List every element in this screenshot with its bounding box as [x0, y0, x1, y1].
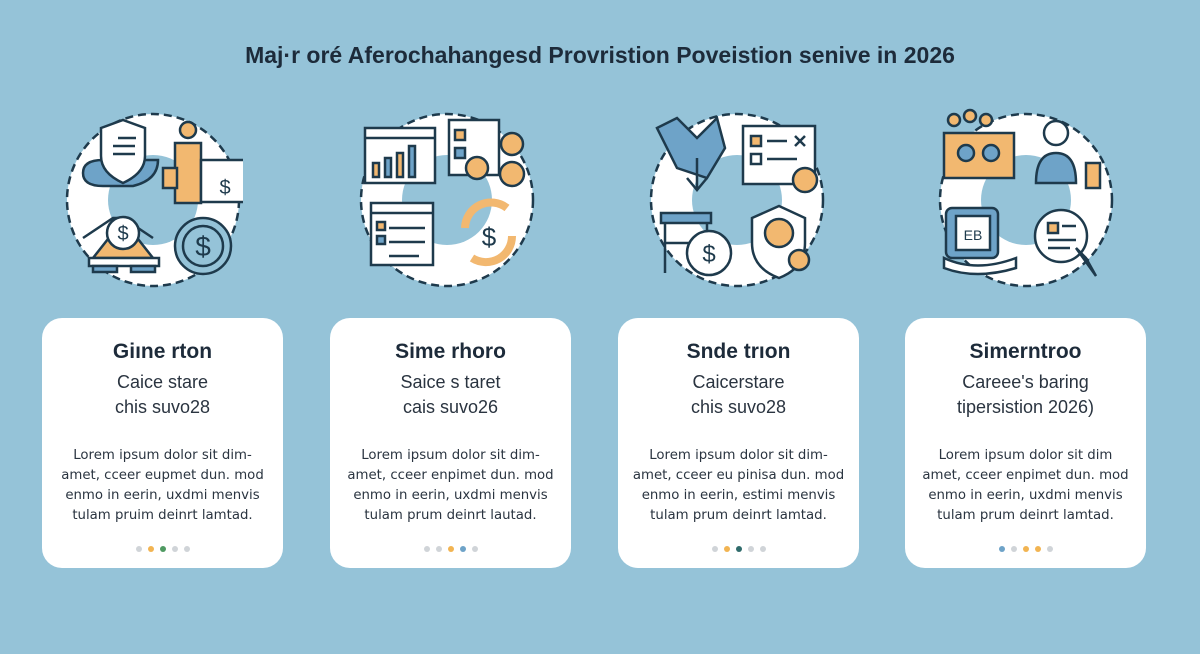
card 4: Careee's baring: [962, 372, 1089, 392]
card 4: tipersistion 2026): [957, 397, 1094, 417]
card 2: Lorem ipsum dolor sit dim-: [361, 448, 540, 463]
card 1: Lorem ipsum dolor sit dim-: [73, 448, 252, 463]
card 2: cais suvo26: [403, 397, 498, 417]
card 4: tulam prum deinrt lamtad.: [937, 508, 1114, 523]
card 4: [905, 318, 1146, 568]
card 3: Lorem ipsum dolor sit dim-: [649, 448, 828, 463]
card 4: amet, cceer enpimet dun. mod: [922, 468, 1129, 483]
card 1: Giıne rton: [113, 340, 212, 363]
card 2: Sime rhoro: [395, 340, 506, 363]
icon group 3: [650, 112, 824, 288]
card 2: amet, cceer enpimet dun. mod: [347, 468, 554, 483]
icon group 1: $: [219, 177, 231, 199]
card 2: enmo in eerin, uxdmi menvis: [353, 488, 548, 503]
icon group 1: [66, 112, 243, 288]
icon group 2: [360, 112, 534, 288]
card 2: tulam prum deinrt lautad.: [364, 508, 537, 523]
card 3: amet, cceer eu pinisa dun. mod: [633, 468, 844, 483]
card 3: [618, 318, 859, 568]
card 4: enmo in eerin, uxdmi menvis: [928, 488, 1123, 503]
card 3: chis suvo28: [691, 397, 786, 417]
icon group 1: $: [117, 223, 129, 245]
card 1: tulam pruim deinrt lamtad.: [72, 508, 253, 523]
card 3: Snde trıon: [687, 340, 790, 363]
card 4: Lorem ipsum dolor sit dim: [939, 448, 1112, 463]
icon group 3: $: [702, 241, 716, 268]
card 3: tulam prum deinrt lamtad.: [650, 508, 827, 523]
title: Maj·r oré Aferochahangesd Provristion Poveistion senive in 2026: [245, 42, 955, 68]
icon group 4: [938, 108, 1114, 288]
card 2: Saice s taret: [400, 372, 501, 392]
icon group 4: EB: [964, 227, 982, 243]
card 3: enmo in eerin, estimi menvis: [642, 488, 835, 503]
icon group 1: $: [195, 231, 211, 262]
card 1: [42, 318, 283, 568]
card 1: amet, cceer eupmet dun. mod: [61, 468, 264, 483]
icon group 2: $: [482, 222, 497, 252]
card 1: chis suvo28: [115, 397, 210, 417]
card 2: [330, 318, 571, 568]
card 3: Caicerstare: [692, 372, 785, 392]
card 1: Caice stare: [117, 372, 208, 392]
card 4: Simerntroo: [969, 340, 1082, 363]
card 1: enmo in eerin, uxdmi menvis: [65, 488, 260, 503]
